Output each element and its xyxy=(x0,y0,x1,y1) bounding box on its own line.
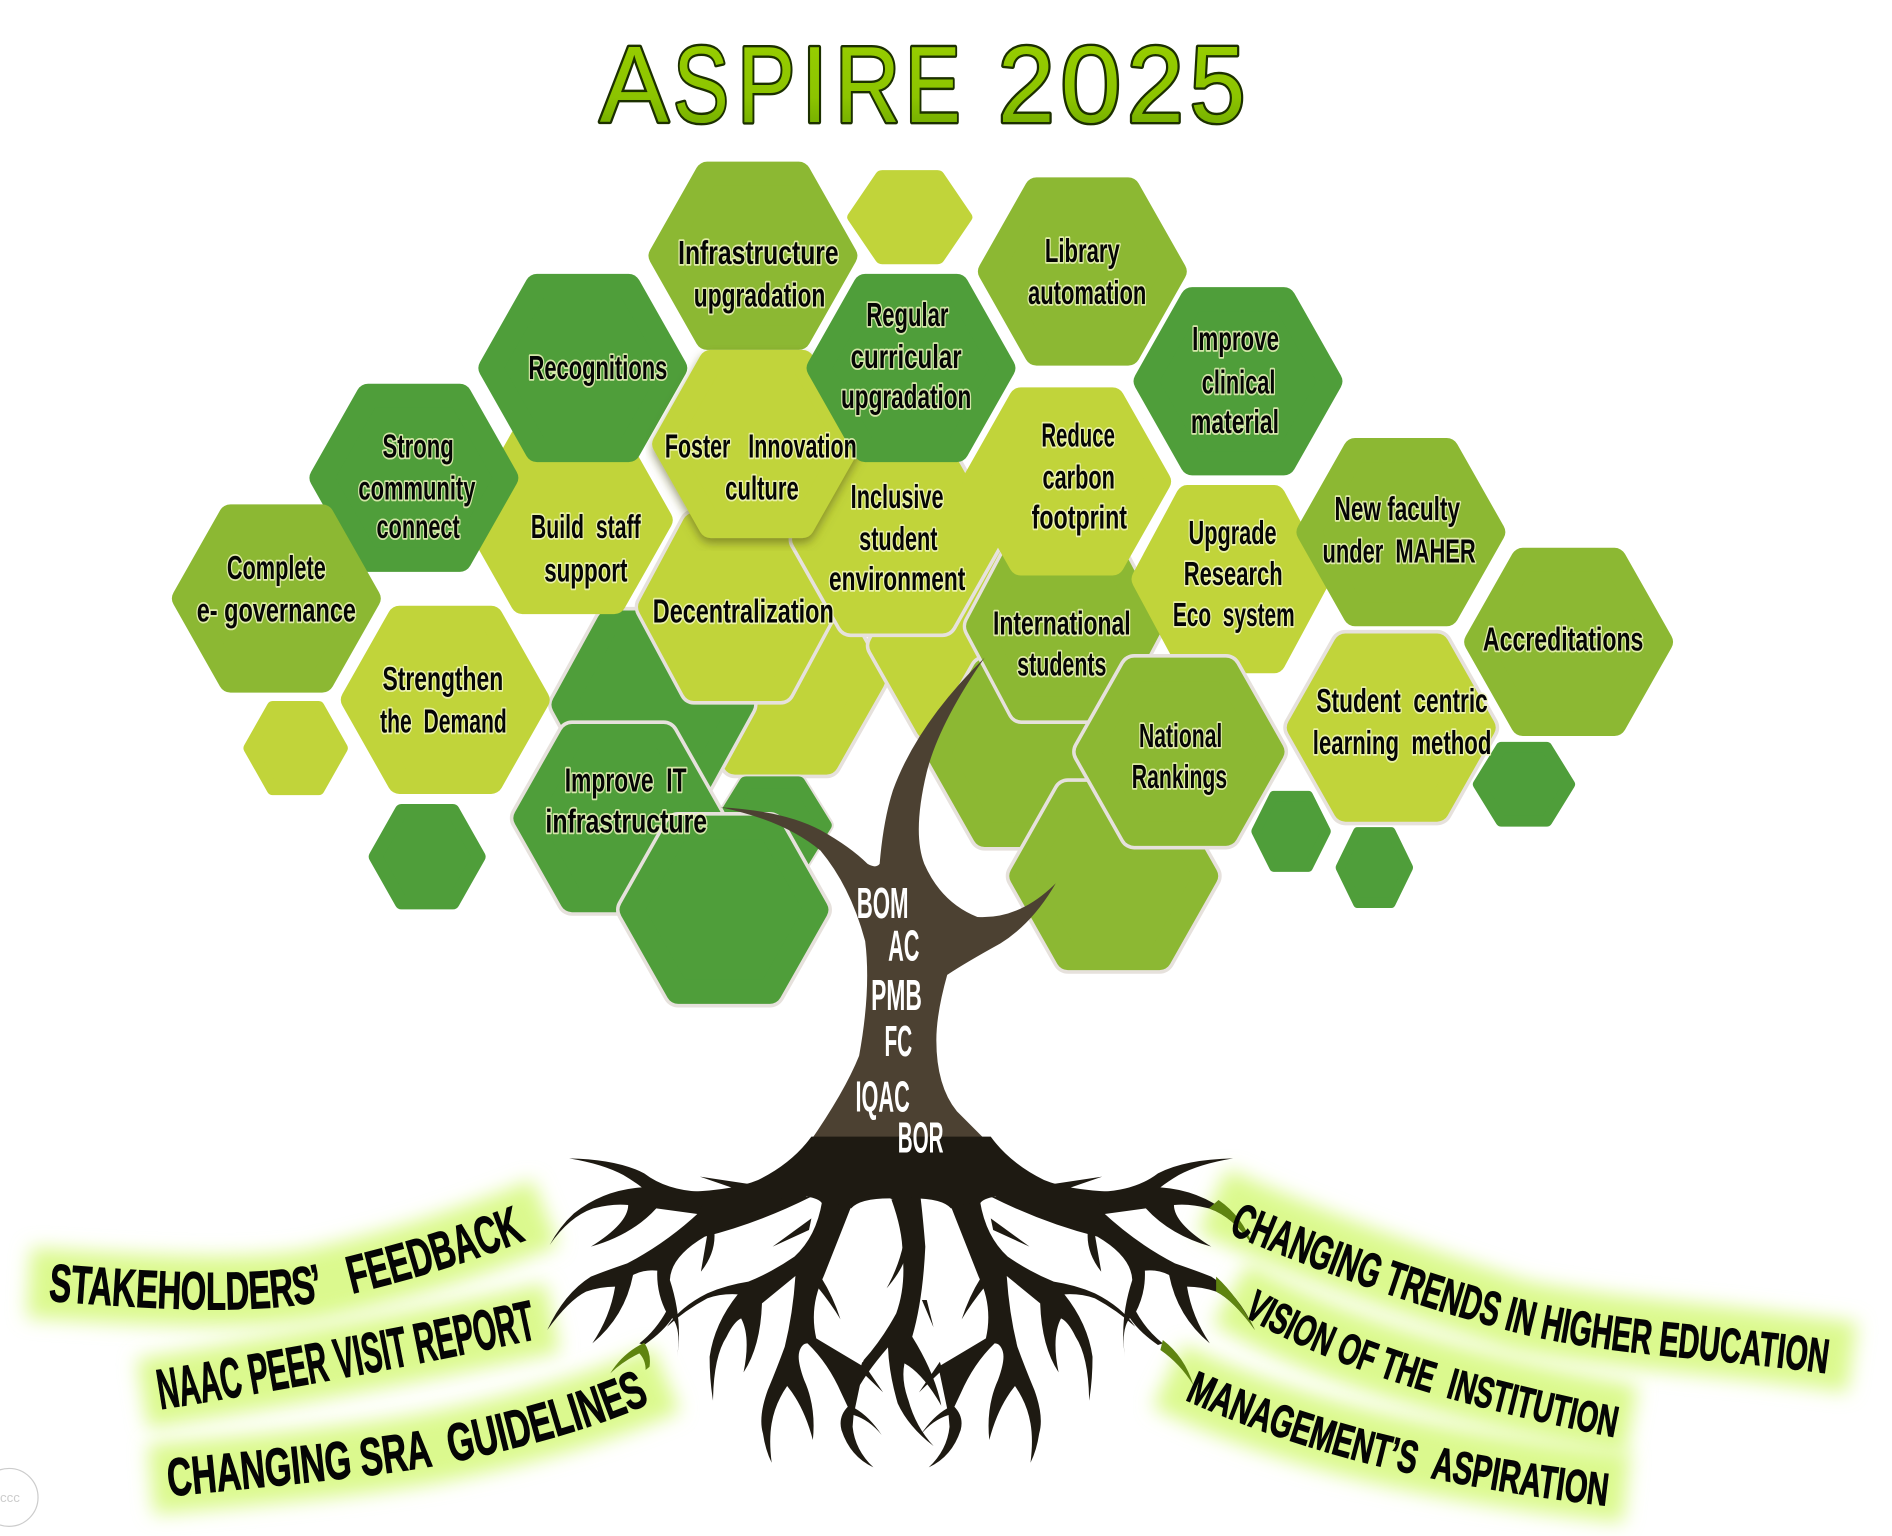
text: Improve clinical material xyxy=(1191,320,1279,441)
text: Improve IT infrastructure xyxy=(545,762,707,841)
hexagon: Inclusive student environment xyxy=(804,457,989,621)
text: Student centric learning method: learning method xyxy=(1313,724,1491,762)
root label: Management's aspiration: MANAGEMENT’S ASPIRATION xyxy=(1186,1370,1609,1506)
title: A xyxy=(600,25,669,146)
title: I xyxy=(801,25,828,146)
text: Foster Innovation culture: Foster Innovation xyxy=(665,427,857,465)
hexagon: blank dark behind xyxy=(563,623,742,787)
hexagon: National Rankings xyxy=(1088,670,1272,834)
text: Inclusive student environment: student xyxy=(859,520,938,558)
trunk labels: BOM xyxy=(857,880,909,928)
root label: NAAC peer visit report: NAAC PEER VISIT REPORT xyxy=(156,1300,532,1410)
text: Regular curricular upgradation: Regular xyxy=(866,296,948,334)
hexagon: blank mid green lower xyxy=(1021,794,1206,958)
text: Foster Innovation culture xyxy=(665,427,857,508)
text: Build staff support: Build staff xyxy=(531,508,641,546)
hexagon: blank dark lower xyxy=(632,828,816,992)
text: Strong community connect: connect xyxy=(376,508,460,546)
hexagon: small dark right 3 xyxy=(1479,747,1569,821)
text: Improve clinical material: material xyxy=(1191,403,1279,441)
text: International students: International xyxy=(993,605,1131,643)
text: Build staff support: support xyxy=(544,552,627,590)
title: 0 xyxy=(1061,25,1121,146)
hexagon: Student centric learning method xyxy=(1299,646,1484,810)
text: Infrastructure upgradation: upgradation xyxy=(694,276,825,314)
text: Regular curricular upgradation: upgradation xyxy=(841,378,971,416)
text: Reduce carbon footprint: footprint xyxy=(1032,498,1127,536)
hexagon: small dark right 2 xyxy=(1340,832,1408,903)
text: Strengthen the Demand: Strengthen xyxy=(383,660,503,698)
hexagon: New faculty under MAHER xyxy=(1309,450,1493,614)
hexagon: Strengthen the Demand xyxy=(353,618,538,782)
text: Inclusive student environment: Inclusive xyxy=(851,478,944,516)
text: Inclusive student environment: environment xyxy=(829,560,965,598)
hexagon: Foster Innovation culture xyxy=(664,362,849,526)
hexagon: blank mid green behind xyxy=(938,671,1123,835)
text: Complete e-governance xyxy=(197,549,356,629)
text: Improve clinical material: Improve xyxy=(1192,320,1279,358)
title: 5 xyxy=(1190,25,1245,146)
text: Regular curricular upgradation: curricular xyxy=(851,338,962,376)
hexagon: Regular curricular upgradation xyxy=(819,286,1003,450)
title: E xyxy=(905,25,960,146)
text: Foster Innovation culture: culture xyxy=(725,470,799,508)
text: Infrastructure upgradation xyxy=(678,234,839,314)
text: Improve IT infrastructure: infrastructure xyxy=(545,803,707,841)
root label: Changing SRA guidelines: CHANGING SRA GUIDELINES xyxy=(168,1372,647,1496)
title: R xyxy=(835,25,900,146)
title: P xyxy=(737,25,795,146)
text: Library automation: automation xyxy=(1028,274,1146,312)
text: New faculty under MAHER: under MAHER xyxy=(1322,532,1476,570)
hexagon: small light top xyxy=(854,176,965,258)
hexagon: Decentralization xyxy=(650,525,825,689)
text: Strengthen the Demand: the Demand xyxy=(380,702,507,740)
text: Decentralization: Decentralization xyxy=(653,593,834,631)
root label: Stakeholders' feedback: STAKEHOLDERS’ FEEDBACK xyxy=(50,1205,526,1310)
text: Library automation xyxy=(1028,232,1146,312)
hexagon: small light left xyxy=(249,707,342,789)
text: Infrastructure upgradation: Infrastructure xyxy=(678,234,839,272)
hexagon: small dark right 1 xyxy=(1256,796,1326,867)
root label: Vision of the institution: VISION OF THE INSTITUTION xyxy=(1248,1288,1620,1438)
text: Accreditations: Accreditations xyxy=(1483,620,1643,658)
trunk labels: FC xyxy=(884,1018,912,1066)
trunk labels: IQAC xyxy=(856,1073,910,1121)
text: Student centric learning method xyxy=(1313,682,1491,762)
hexagon: Improve clinical material xyxy=(1146,299,1330,463)
hexagon: International students xyxy=(977,544,1151,708)
title: 2 xyxy=(1127,25,1184,146)
hexagon: Reduce carbon footprint xyxy=(974,399,1159,563)
text: International students: students xyxy=(1017,646,1106,684)
hexagon labels xyxy=(197,232,1643,841)
text: Strong community connect xyxy=(358,427,476,546)
text: Reduce carbon footprint: Reduce xyxy=(1041,416,1115,454)
hexagon: blank light under trunk xyxy=(881,563,1066,728)
text: National Rankings xyxy=(1132,717,1227,796)
text: Recognitions: Recognitions xyxy=(529,349,667,387)
text: Upgrade Research Eco system: Eco system xyxy=(1173,596,1295,634)
hexagon: Upgrade Research Eco system xyxy=(1143,497,1318,661)
text: Build staff support xyxy=(531,508,641,590)
hexagon: Recognitions xyxy=(491,286,675,450)
trunk labels xyxy=(856,880,944,1162)
text: National Rankings: National xyxy=(1139,717,1222,755)
text: Complete e-governance: e- governance xyxy=(197,591,356,629)
corner badge xyxy=(0,1468,38,1526)
text: BOR xyxy=(898,1114,944,1162)
text: Reduce carbon footprint: carbon xyxy=(1043,459,1115,497)
title: S xyxy=(673,25,729,146)
hexagon: Build staff support xyxy=(476,438,661,602)
title: 2 xyxy=(998,25,1055,146)
root label: Changing trends in higher education: CHANGING TRENDS IN HIGHER EDUCATION xyxy=(1232,1205,1830,1374)
text: New faculty under MAHER: New faculty xyxy=(1335,490,1460,528)
text: Improve clinical material: clinical xyxy=(1202,363,1275,401)
corner badge: ccc xyxy=(0,1490,20,1505)
glow highlights behind root labels xyxy=(29,1201,1852,1488)
tree roots xyxy=(547,1137,1255,1467)
text: New faculty under MAHER xyxy=(1322,490,1476,570)
text: Library automation: Library xyxy=(1045,232,1120,270)
text: International students xyxy=(993,605,1131,684)
text: Improve IT infrastructure: Improve IT xyxy=(565,762,687,800)
hexagon: Infrastructure upgradation xyxy=(661,174,845,338)
text: National Rankings: Rankings xyxy=(1132,758,1227,796)
hexagon: Strong community connect xyxy=(322,396,506,560)
hexagon: Accreditations xyxy=(1476,560,1661,724)
trunk labels: AC xyxy=(888,922,919,970)
hexagon: blank light behind xyxy=(688,598,873,763)
text: Reduce carbon footprint xyxy=(1032,416,1127,536)
hexagon: Library automation xyxy=(990,189,1175,354)
tree trunk xyxy=(720,658,1056,1144)
text: Complete e-governance: Complete xyxy=(227,549,326,587)
text: Upgrade Research Eco system xyxy=(1173,514,1295,634)
hexagon canopy xyxy=(184,174,1661,992)
hexagon: Complete e-governance xyxy=(184,516,369,681)
hexagon: Improve IT infrastructure xyxy=(526,736,710,900)
text: Strengthen the Demand xyxy=(380,660,507,740)
text: Strong community connect: Strong xyxy=(383,427,454,465)
text: Upgrade Research Eco system: Upgrade xyxy=(1189,514,1277,552)
hexagon: small dark left xyxy=(375,811,479,903)
text: Upgrade Research Eco system: Research xyxy=(1184,555,1283,593)
text: Inclusive student environment xyxy=(829,478,965,598)
text: Strong community connect: community xyxy=(358,470,476,508)
text: Student centric learning method: Student centric xyxy=(1316,682,1488,720)
hexagon: small dark behind xyxy=(720,783,825,868)
trunk labels: PMB xyxy=(871,972,922,1020)
text: Regular curricular upgradation xyxy=(841,296,971,416)
